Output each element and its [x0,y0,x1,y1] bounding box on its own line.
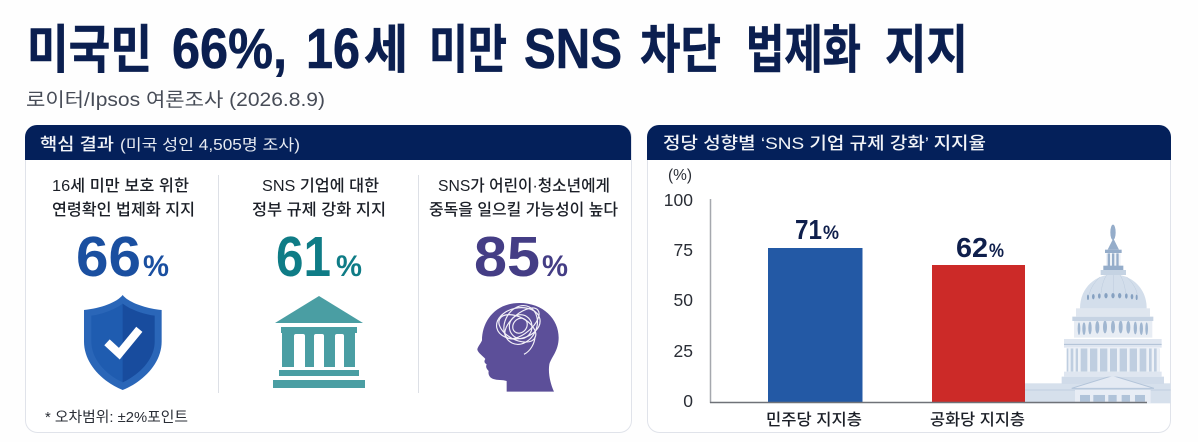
title: 법제화 [746,22,861,80]
y axis: 100 [664,190,693,210]
panel: key results [25,125,632,432]
y axis: 75 [674,240,693,260]
panel header [647,125,1171,160]
icon: government building [273,296,365,388]
column: government regulation [252,177,386,388]
panel background [26,126,632,432]
icon: head with tangled thoughts [477,300,559,392]
column label: SNS 기업에 대한 [262,177,379,195]
stat: 61%: % [336,250,362,283]
title: 66%, [172,17,287,81]
column label: 16세 미만 보호 위한 [52,177,189,195]
panel header: 핵심 결과 [40,135,114,154]
title: SNS [524,17,622,81]
title: 차단 [640,22,721,80]
icon: shield with check [84,295,162,390]
bar: Democrats [768,248,862,402]
stat: 85%: % [542,250,568,283]
stat: 85% [474,225,568,289]
value: 62%: % [989,241,1004,262]
column label [429,177,618,219]
value: 71%: 71 [795,214,822,245]
bar: Republicans [932,265,1025,402]
y axis: 0 [683,391,693,411]
stat: 66%: % [143,250,169,283]
y axis: 50 [674,290,693,310]
value: 71%: % [823,223,839,244]
footnote: * 오차범위: ±2%포인트 [45,409,188,426]
column label: 연령확인 법제화 지지 [52,201,195,219]
y axis: 25 [674,341,693,361]
title: 미국민 [27,22,152,80]
stat: 66%: 66 [76,225,141,289]
bar chart [664,167,1147,429]
label: Democrats: 민주당 지지층 [766,411,862,429]
title: 세 [364,22,408,80]
stat: 61%: 61 [276,225,331,289]
panel header [25,125,631,160]
title: 미만 [429,22,507,80]
dividers [218,175,418,393]
column: addiction risk [429,177,618,392]
panel header: 정당 성향별 ‘SNS 기업 규제 강화’ 지지율 [663,134,986,153]
column label [252,177,386,219]
subtitle: source: 로이터/Ipsos 여론조사 (2026.8.9) [26,89,325,111]
stat: 66% [76,225,169,289]
illustration: capitol building [1023,225,1171,403]
panel header: (미국 성인 4,505명 조사) [120,136,300,154]
value: 62% [956,232,1004,263]
column label: SNS가 어린이·청소년에게 [438,177,610,195]
stat: 85%: 85 [474,225,540,289]
column label: 정부 규제 강화 지지 [252,201,386,219]
label: Republicans: 공화당 지지층 [930,411,1025,429]
y axis [664,167,710,411]
panel: support by party [647,125,1171,432]
title: 16 [306,17,360,81]
value: 62%: 62 [956,232,988,263]
column: age verification law [52,177,195,390]
y axis: (%) [668,167,692,184]
title [27,17,968,81]
column label [52,177,195,219]
x axis [710,402,1147,404]
column label: 중독을 일으킬 가능성이 높다 [429,201,618,219]
title: 지지 [885,22,968,80]
panel background [648,126,1170,432]
